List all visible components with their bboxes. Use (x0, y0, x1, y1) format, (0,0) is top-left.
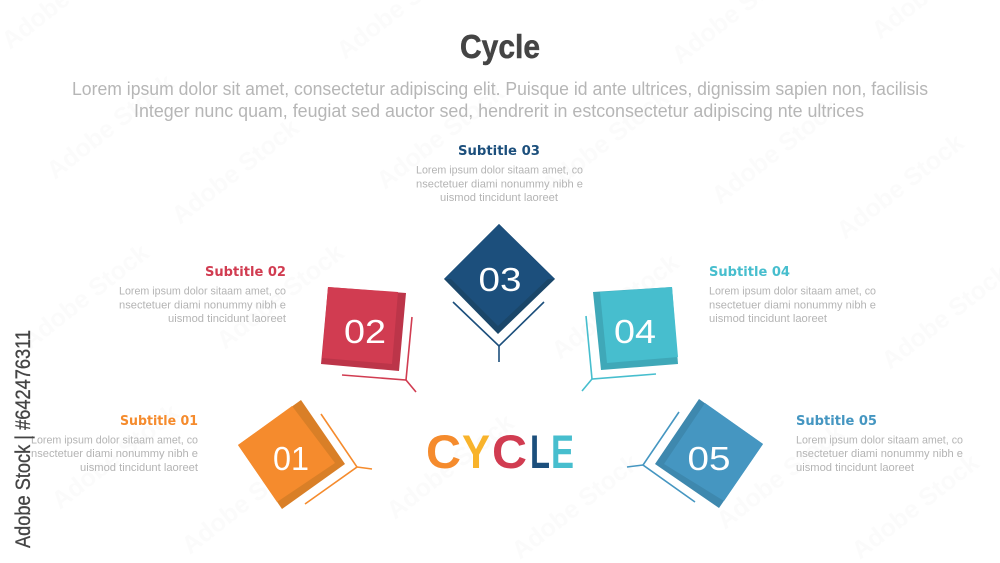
step 05 bracket arrow (643, 412, 695, 502)
step 01 text block: Lorem ipsum dolor sitaam amet, co (31, 434, 198, 446)
step 03 text block: nsectetuer diami nonummy nibh e (416, 178, 583, 190)
centre CYCLE wordmark: C (426, 425, 461, 478)
step 05 rotated square: 05 (688, 440, 730, 477)
step 04 bracket arrow (586, 316, 656, 379)
centre CYCLE wordmark: Y (462, 425, 490, 478)
faint background watermarks: Adobe Stock (536, 84, 674, 200)
step 05 rotated square (655, 399, 763, 508)
step 02 text block: Lorem ipsum dolor sitaam amet, co (119, 286, 286, 298)
step 01 text block: Subtitle 01 (120, 414, 198, 429)
step 01 text block: uismod tincidunt laoreet (80, 462, 198, 474)
vertical stock image credit: Adobe Stock | #642476311 (12, 330, 35, 548)
step 03 rotated square: 03 (478, 261, 522, 298)
step 01 bracket tail (357, 467, 372, 469)
step 05 text block: Lorem ipsum dolor sitaam amet, co (796, 434, 963, 446)
faint background watermarks: Adobe Stock (546, 249, 684, 365)
faint background watermarks: Adobe Stock (371, 79, 509, 195)
step 04 text block (709, 265, 876, 325)
step 02 bracket arrow (342, 317, 412, 380)
title: Cycle (460, 28, 540, 65)
step 03 text block: uismod tincidunt laoreet (440, 192, 558, 204)
faint background watermarks: Adobe Stock (506, 449, 644, 563)
step 05 text block: uismod tincidunt laoreet (796, 462, 914, 474)
step 05 text block: Subtitle 05 (796, 414, 877, 429)
faint background watermarks: Adobe Stock (166, 114, 304, 230)
step 03 text block (416, 144, 583, 204)
centre CYCLE wordmark: L (530, 425, 550, 478)
faint background watermarks: Adobe Stock (211, 239, 349, 355)
step 02 rotated square (321, 287, 406, 371)
step 04 text block: Lorem ipsum dolor sitaam amet, co (709, 286, 876, 298)
step 01 text block (31, 414, 198, 474)
step 05 bracket tail (627, 465, 643, 467)
step 01 text block: nsectetuer diami nonummy nibh e (31, 448, 198, 460)
step 03 text block: Lorem ipsum dolor sitaam amet, co (416, 164, 583, 176)
step 04 bracket tail (582, 379, 592, 391)
step 05 text block: nsectetuer diami nonummy nibh e (796, 448, 963, 460)
step 01 rotated square (238, 400, 345, 509)
description text: Integer nunc quam, feugiat sed auctor sed, hendrerit in estconsectetur adipiscing nte ultrices (134, 101, 864, 121)
faint background watermarks: Adobe Stock (711, 419, 849, 535)
step 03 rotated square (444, 224, 555, 334)
step 02 bracket tail (406, 380, 416, 392)
step 04 rotated square (593, 287, 678, 370)
centre CYCLE wordmark: E (551, 425, 574, 478)
step 03 text block: Subtitle 03 (458, 144, 540, 159)
step 04 text block: uismod tincidunt laoreet (709, 313, 827, 325)
step 03 bracket arrow (453, 302, 544, 346)
faint background watermarks: Adobe Stock (831, 129, 969, 245)
step 01 rotated square: 01 (273, 440, 309, 477)
faint background watermarks: Adobe Stock (176, 444, 314, 560)
step 02 text block (119, 265, 286, 325)
description text: Lorem ipsum dolor sit amet, consectetur adipiscing elit. Puisque id ante ultrices, dignissim sapien non, facilisis (72, 79, 928, 99)
step 02 text block: Subtitle 02 (205, 265, 286, 280)
step 04 text block: Subtitle 04 (709, 265, 790, 280)
step 01 bracket arrow (305, 414, 357, 504)
step 04 rotated square: 04 (614, 313, 656, 350)
centre CYCLE wordmark (426, 425, 574, 478)
centre CYCLE wordmark: C (492, 425, 527, 478)
step 02 text block: uismod tincidunt laoreet (168, 313, 286, 325)
description text (72, 79, 928, 121)
faint background watermarks: Adobe Stock (846, 449, 984, 563)
faint background watermarks: Adobe Stock (706, 94, 844, 210)
step 03 bracket tail (498, 346, 500, 362)
step 04 text block: nsectetuer diami nonummy nibh e (709, 300, 876, 312)
step 02 text block: nsectetuer diami nonummy nibh e (119, 300, 286, 312)
faint background watermarks: Adobe Stock (16, 239, 154, 355)
faint background watermarks: Adobe Stock (381, 409, 519, 525)
faint background watermarks: Adobe Stock (41, 69, 179, 185)
step 05 text block (796, 414, 963, 474)
faint background watermarks: Adobe Stock (46, 399, 184, 515)
step 02 rotated square: 02 (344, 313, 386, 350)
